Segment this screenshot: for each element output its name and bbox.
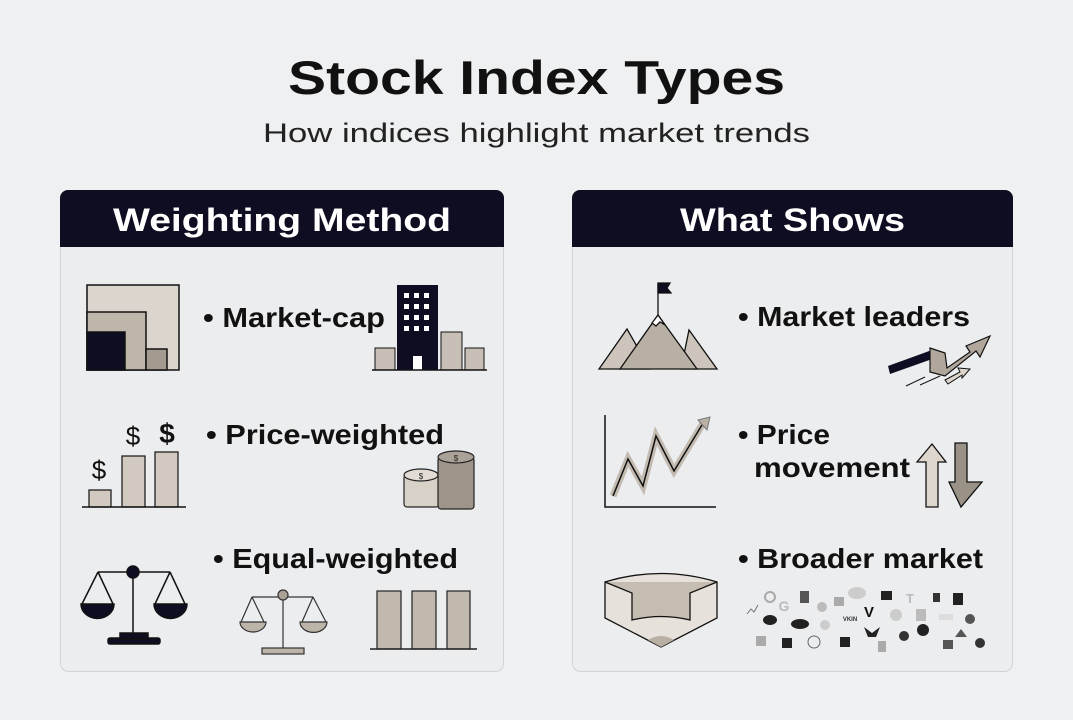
heading: weighting method [60,190,504,247]
icon: buildings [372,285,487,370]
heading: what shows [572,190,1013,247]
text: equal-weighted: • Equal-weighted [213,543,458,574]
heading: what shows: What Shows [680,202,905,238]
icon: company logos cluster: V [864,604,874,621]
icon: company logos cluster: T [906,591,914,606]
icon: company logos cluster: VKIN [843,617,857,623]
icon: coins: $ [454,454,459,463]
icon: rising arrow [888,336,990,386]
icon: price bars: $ [159,418,175,449]
icon: bowl [605,574,717,647]
icon: market-cap squares [87,285,179,370]
text: market-cap: • Market-cap [203,302,385,333]
icon: mountain with flag [599,283,717,369]
text: price movement: movement [754,452,910,483]
subtitle: How indices highlight market trends [263,118,810,148]
icon: coins [404,451,474,509]
heading: weighting method: Weighting Method [113,202,451,238]
text: market leaders: • Market leaders [738,301,970,332]
icon: coins: $ [419,472,424,481]
icon: price bars: $ [126,421,141,451]
icon: large scale [81,566,187,644]
panel: weighting method [60,190,504,672]
text: price-weighted: • Price-weighted [206,419,444,450]
panel: what shows [572,190,1013,672]
text: price movement: • Price [738,419,830,450]
icon: small scale [240,590,327,654]
icon: up/down arrows [917,443,982,507]
text: broader market: • Broader market [738,543,983,574]
icon: line chart [605,415,716,507]
icon: company logos cluster [747,587,985,652]
icon: company logos cluster: G [779,598,790,614]
icon: price bars [82,418,186,507]
text: price movement [738,419,910,483]
title: Stock Index Types [288,51,785,104]
icon: equal bars [370,591,477,649]
icon: price bars: $ [92,455,107,485]
